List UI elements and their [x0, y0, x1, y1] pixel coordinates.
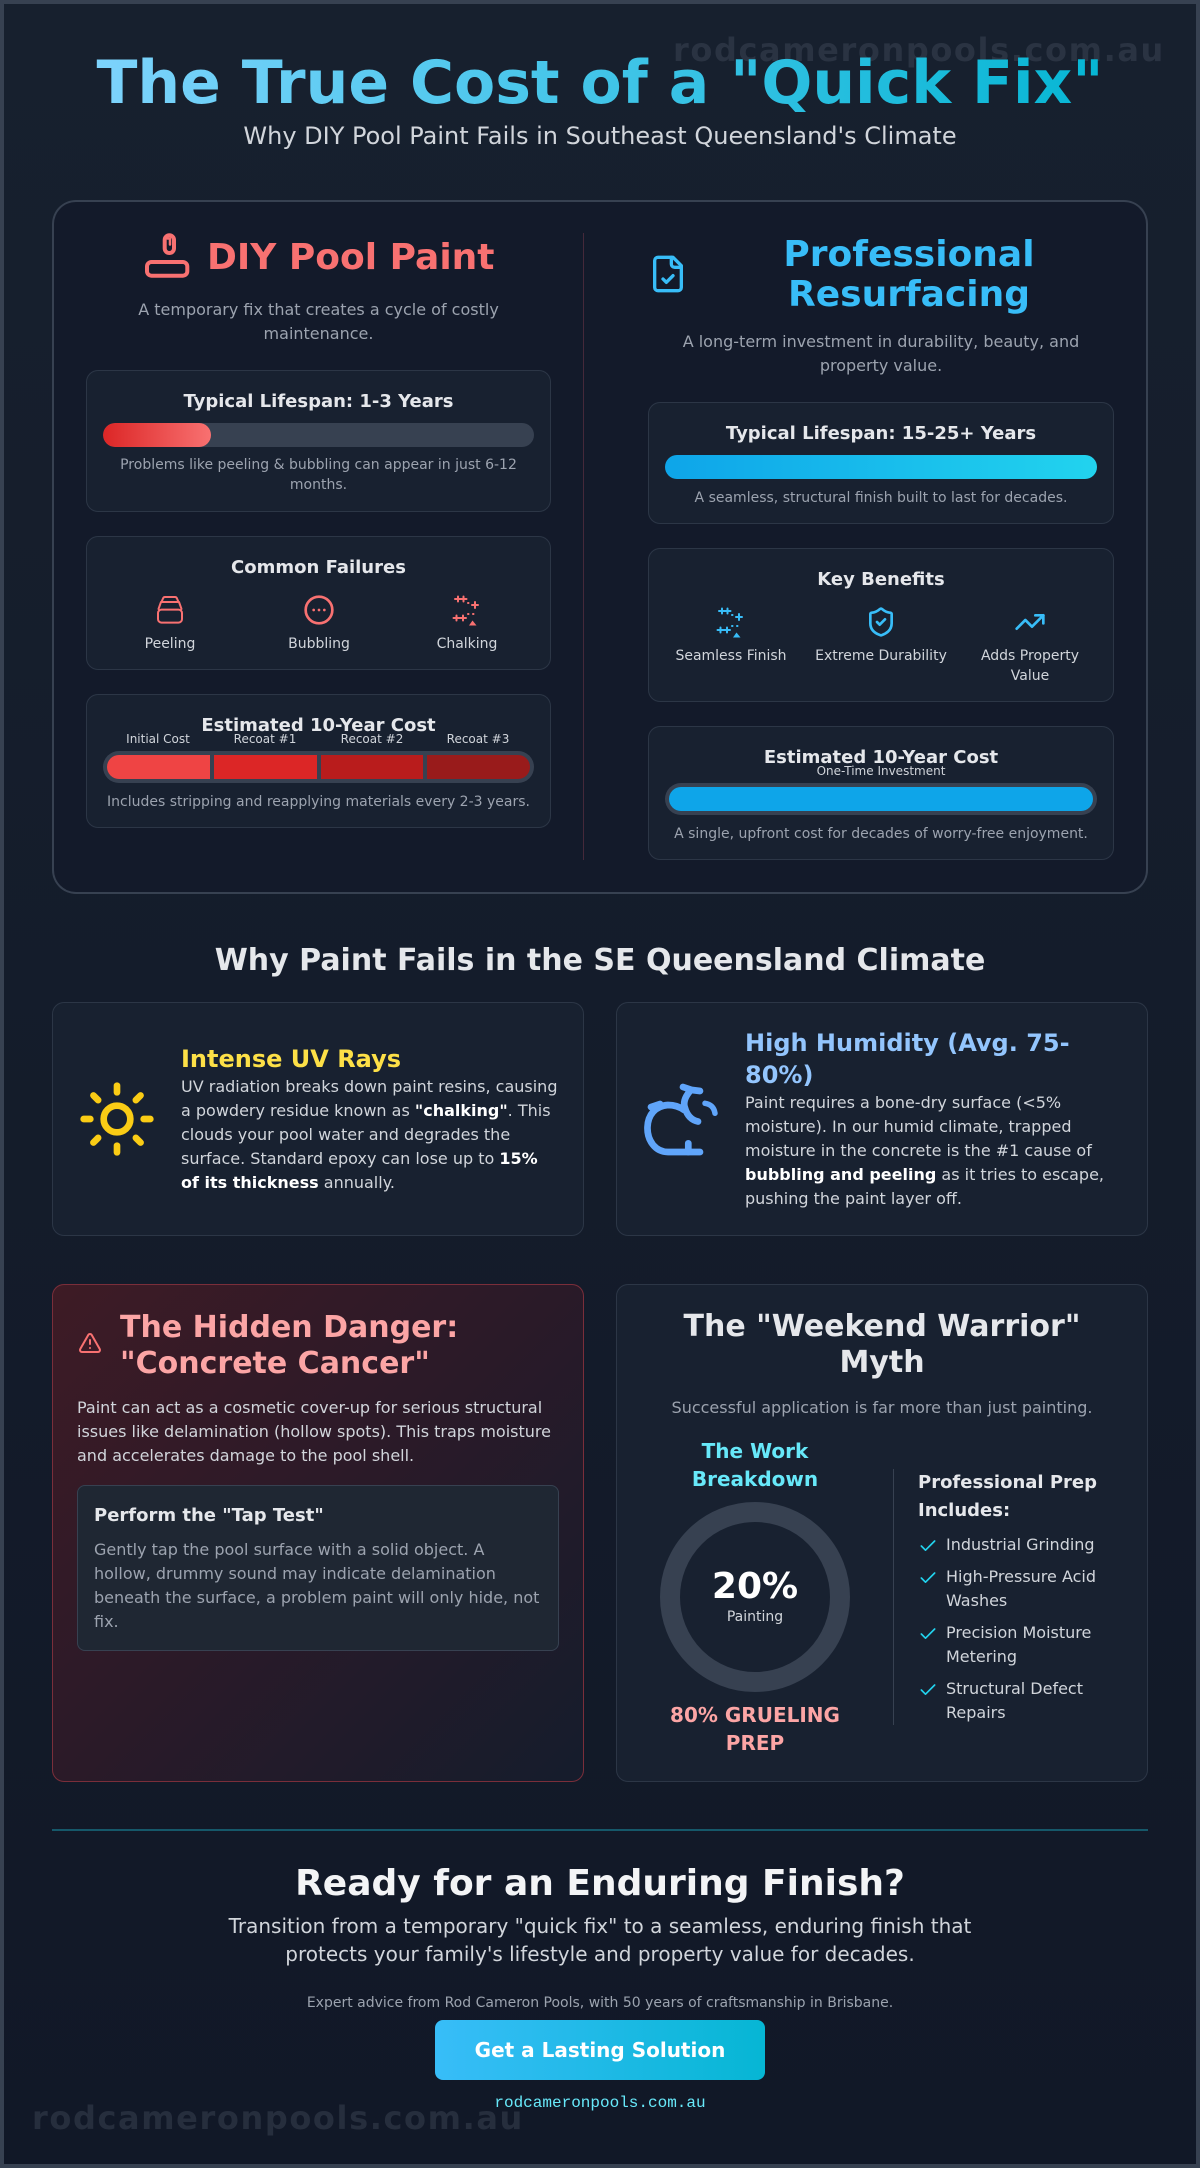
body text: Gently tap the pool surface with a solid object. A: [94, 1540, 484, 1559]
icon: peeling: [157, 596, 183, 624]
body text: clouds your pool water and degrades the: [181, 1125, 510, 1144]
button: [435, 2020, 765, 2080]
list item: Metering: [946, 1647, 1017, 1666]
donut label: Painting: [727, 1609, 783, 1625]
body text: surface. Standard epoxy can lose up to 15%: [181, 1149, 538, 1168]
body text: Paint can act as a cosmetic cover-up for serious structural: [77, 1398, 542, 1417]
body text: bubbling and peeling as it tries to escape,: [745, 1165, 1104, 1184]
body text: moisture in the concrete is the #1 cause of: [745, 1141, 1092, 1160]
panel: comparison: [52, 200, 1148, 894]
donut chart: [660, 1502, 850, 1692]
note: Includes stripping and reapplying materials every 2-3 years.: [107, 794, 530, 810]
panel: typical lifespan: [648, 402, 1114, 524]
callout: 80 percent prep: [670, 1703, 840, 1755]
note: [120, 457, 517, 493]
label: [981, 648, 1079, 684]
title: The True Cost of a "Quick Fix": [96, 48, 1104, 118]
list item: Precision Moisture: [946, 1623, 1091, 1642]
heading: Perform the "Tap Test": [94, 1505, 324, 1526]
body text: moisture). In our humid climate, trapped: [745, 1117, 1071, 1136]
panel: intense UV rays: [52, 1002, 584, 1236]
button: Get a Lasting Solution: [475, 2038, 725, 2062]
body text: Transition from a temporary "quick fix" to a seamless, enduring finish that: [229, 1914, 971, 1938]
lifespan bar: [103, 423, 534, 447]
body text: [77, 1398, 551, 1465]
label: One-Time Investment: [817, 764, 945, 778]
lifespan bar: [665, 455, 1097, 479]
label: Peeling: [145, 636, 195, 652]
icon: bubbling: [304, 595, 334, 625]
icon: check: [920, 1572, 936, 1583]
heading: Professional Resurfacing: Professional: [783, 234, 1035, 275]
watermark: top right: rodcameronpools.com.au: [673, 31, 1165, 69]
label: Seamless Finish: [675, 648, 787, 664]
icon: humid cloud: [644, 1084, 718, 1156]
heading: Professional Resurfacing: Resurfacing: [788, 274, 1030, 315]
heading: High Humidity (Avg. 75-: [745, 1029, 1070, 1057]
label: Extreme Durability: [815, 648, 947, 664]
callout: 80 percent prep: 80% GRUELING: [670, 1703, 840, 1727]
label: Adds Property: [981, 648, 1079, 664]
heading: 80%): [745, 1061, 813, 1089]
callout: 80 percent prep: PREP: [726, 1731, 784, 1755]
icon: file check: [653, 256, 683, 292]
watermark: bottom left: rodcameronpools.com.au: [32, 2099, 524, 2137]
panel: hidden danger: [52, 1284, 584, 1782]
note: A seamless, structural finish built to last for decades.: [695, 490, 1067, 506]
body text: fix.: [94, 1612, 119, 1631]
heading: [684, 1309, 1080, 1380]
body text: [94, 1540, 539, 1631]
attribution: Expert advice from Rod Cameron Pools, with 50 years of craftsmanship in Brisbane.: [307, 1995, 893, 2011]
description: [682, 332, 1079, 375]
icon: paint tool: [145, 233, 190, 278]
body text: UV radiation breaks down paint resins, causing: [181, 1077, 557, 1096]
body text: of its thickness annually.: [181, 1173, 395, 1192]
list item: [946, 1623, 1091, 1666]
heading: work breakdown: The Work: [702, 1439, 808, 1463]
description: property value.: [820, 356, 942, 375]
list item: Industrial Grinding: [946, 1535, 1095, 1554]
body text: pushing the paint layer off.: [745, 1189, 962, 1208]
panel: typical lifespan: [86, 370, 551, 512]
heading: Ready for an Enduring Finish?: [295, 1863, 905, 1904]
note: Problems like peeling & bubbling can appear in just 6-12: [120, 457, 517, 473]
segmented cost bar: [103, 751, 534, 783]
panel: tap test: [77, 1485, 559, 1651]
heading: Key Benefits: [817, 569, 945, 590]
icon: warning triangle: [79, 1333, 101, 1353]
panel: estimated cost professional: [648, 726, 1114, 860]
list item: Structural Defect: [946, 1679, 1083, 1698]
list item: Repairs: [946, 1703, 1006, 1722]
note: A single, upfront cost for decades of worry-free enjoyment.: [674, 826, 1088, 842]
body text: [745, 1093, 1104, 1208]
list item: [946, 1679, 1083, 1722]
heading: "Concrete Cancer": [120, 1346, 430, 1381]
heading: professional prep: Includes:: [918, 1500, 1010, 1521]
description: A temporary fix that creates a cycle of costly: [138, 300, 499, 319]
heading: Myth: [839, 1345, 925, 1380]
heading: Professional Resurfacing: [783, 234, 1035, 315]
heading: work breakdown: [692, 1439, 818, 1491]
body text: beneath the surface, a problem paint will only hide, not: [94, 1588, 539, 1607]
body text: a powdery residue known as "chalking". This: [181, 1101, 551, 1120]
note: months.: [290, 477, 347, 493]
label: Recoat #3: [447, 732, 509, 746]
checklist: [920, 1535, 1096, 1722]
heading: work breakdown: Breakdown: [692, 1467, 818, 1491]
panel: estimated cost DIY: [86, 694, 551, 828]
label: Value: [1011, 668, 1049, 684]
heading: climate section: Why Paint Fails in the SE Queensland Climate: [215, 943, 985, 978]
description: maintenance.: [264, 324, 373, 343]
panel: call to action: [52, 1829, 1148, 2130]
label: Bubbling: [288, 636, 350, 652]
heading: professional prep: [918, 1472, 1097, 1521]
body text: and accelerates damage to the pool shell.: [77, 1446, 414, 1465]
list item: Washes: [946, 1591, 1007, 1610]
icon: sun: [80, 1082, 154, 1156]
subtitle: Why DIY Pool Paint Fails in Southeast Queensland's Climate: [243, 122, 957, 150]
heading: [745, 1029, 1070, 1089]
panel: DIY pool paint: [86, 233, 551, 828]
heading: The Hidden Danger:: [120, 1310, 458, 1345]
icon: trending up: [1015, 614, 1045, 630]
body text: Paint requires a bone-dry surface (<5%: [745, 1093, 1061, 1112]
website link: rodcameronpools.com.au: [494, 2094, 706, 2112]
subheading: Successful application is far more than just painting.: [672, 1398, 1092, 1417]
heading: Estimated 10-Year Cost: [201, 715, 436, 736]
body text: protects your family's lifestyle and property value for decades.: [285, 1942, 915, 1966]
heading: professional prep: Professional Prep: [918, 1472, 1097, 1493]
icon: chalking: [452, 596, 479, 626]
cost bar: [665, 783, 1097, 815]
heading: Estimated 10-Year Cost: [764, 747, 998, 768]
donut value: 20%: [712, 1566, 798, 1607]
label: Initial Cost: [126, 732, 190, 746]
icon: check: [920, 1540, 936, 1551]
description: A long-term investment in durability, beauty, and: [683, 332, 1079, 351]
label: Chalking: [437, 636, 497, 652]
heading: Typical Lifespan: 15-25+ Years: [726, 423, 1036, 444]
icon: check: [920, 1684, 936, 1695]
heading: Typical Lifespan: 1-3 Years: [184, 391, 454, 412]
vertical divider: [893, 1469, 894, 1725]
column divider: [583, 233, 584, 860]
heading: DIY Pool Paint: DIY Pool Paint: [207, 237, 494, 278]
heading: Intense UV Rays: [181, 1045, 401, 1073]
list item: High-Pressure Acid: [946, 1567, 1096, 1586]
icon: check: [920, 1628, 936, 1639]
description: [138, 300, 499, 343]
body text: [228, 1914, 971, 1966]
panel: professional resurfacing: [648, 234, 1114, 860]
body text: [181, 1077, 557, 1192]
body text: issues like delamination (hollow spots). This traps moisture: [77, 1422, 551, 1441]
panel: common failures: [86, 536, 551, 670]
list item: [946, 1567, 1096, 1610]
panel: weekend warrior myth: [616, 1284, 1148, 1782]
icon: seamless finish: [716, 608, 743, 638]
body text: hollow, drummy sound may indicate delamination: [94, 1564, 496, 1583]
heading: Common Failures: [231, 557, 406, 578]
panel: key benefits: [648, 548, 1114, 702]
heading: [120, 1310, 458, 1381]
label: Recoat #1: [234, 732, 296, 746]
panel: high humidity: [616, 1002, 1148, 1236]
label: Recoat #2: [341, 732, 403, 746]
icon: shield check: [869, 607, 893, 637]
heading: The "Weekend Warrior": [684, 1309, 1080, 1344]
